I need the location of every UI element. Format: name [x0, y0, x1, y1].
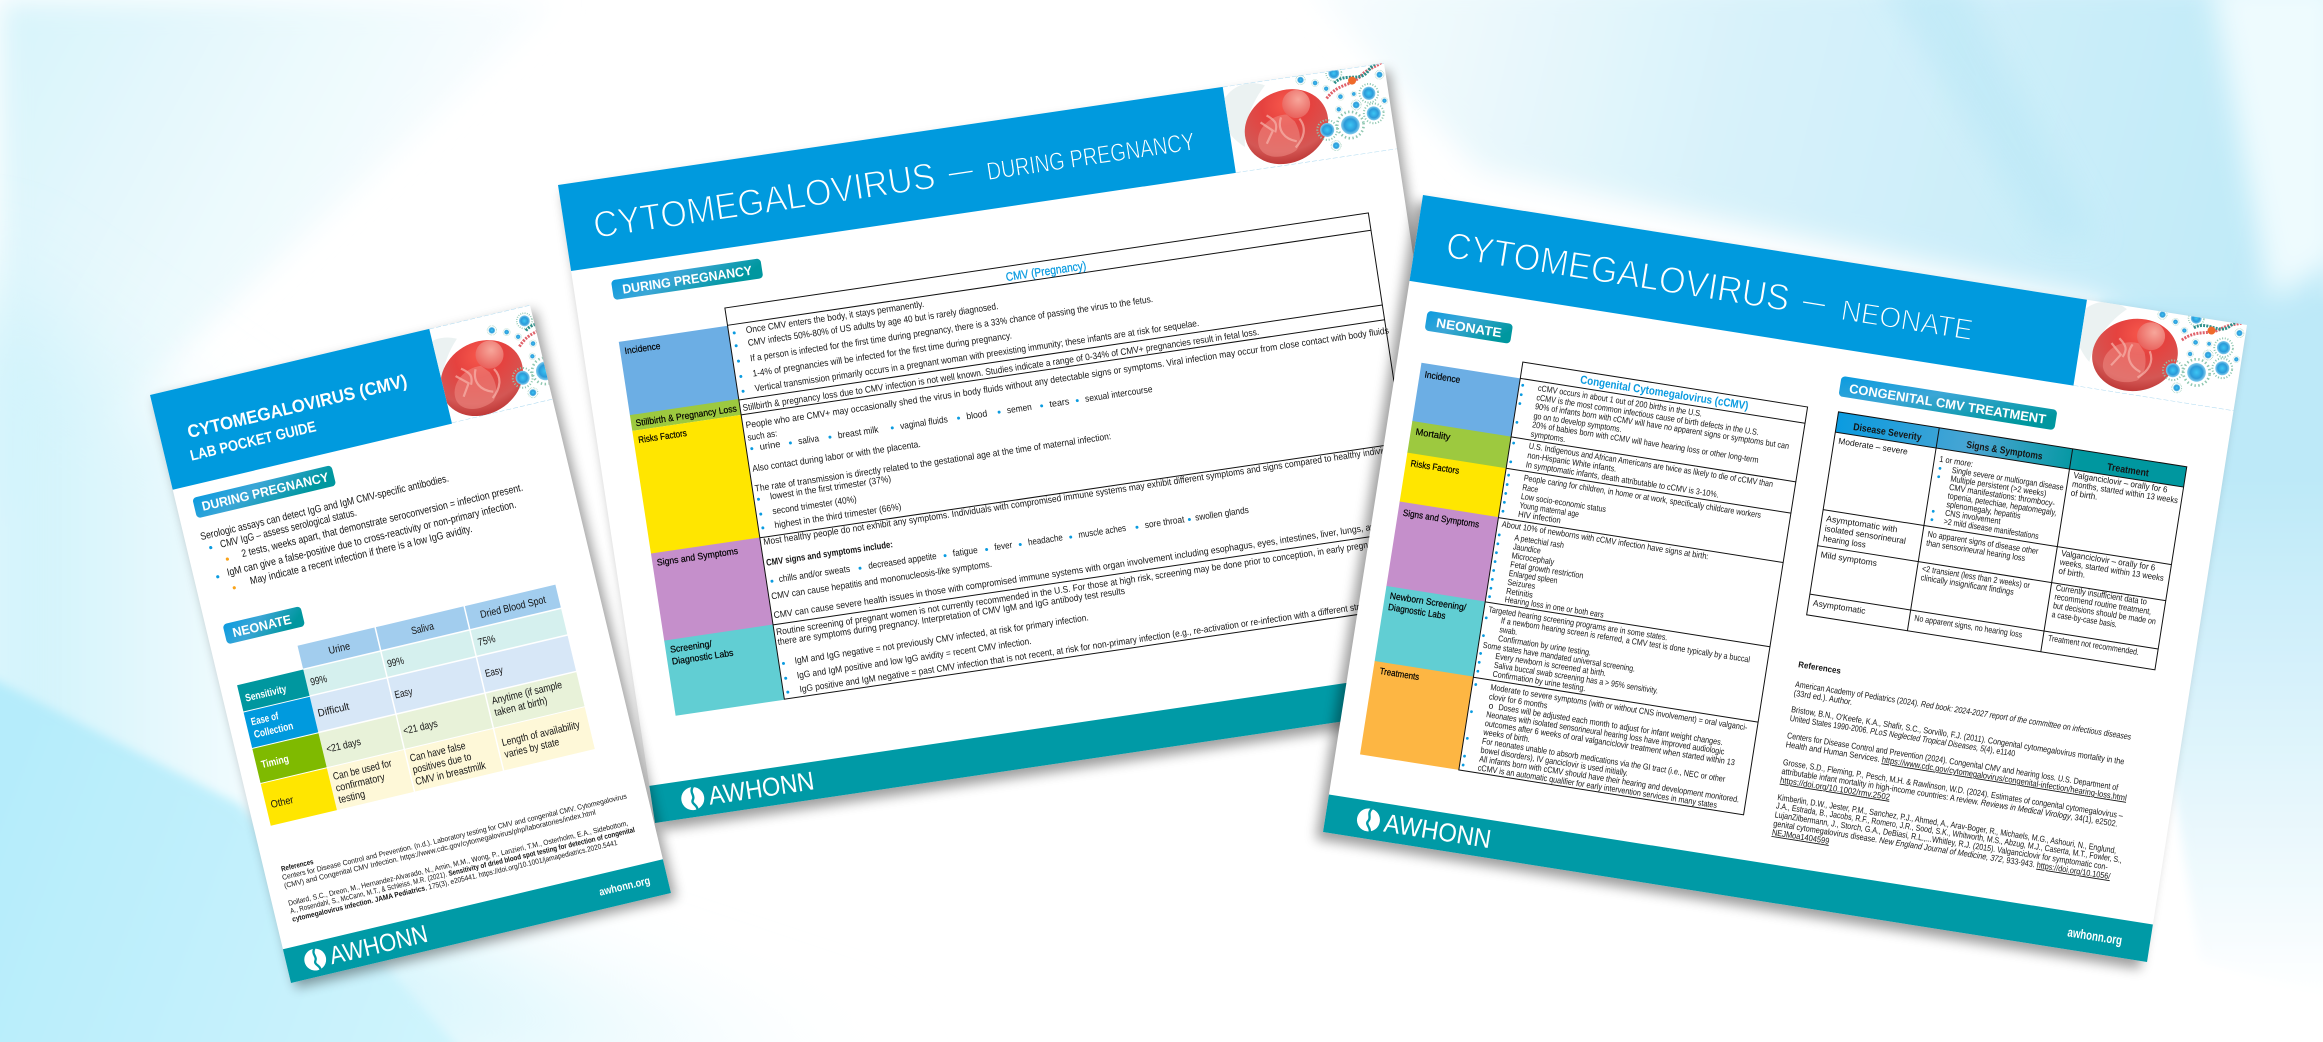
icon: fetus and virus illustration — [2074, 302, 2244, 411]
references: American Academy of Pediatrics (2024). Red book: 2024-2027 report of the committee on infectious diseases — [1795, 679, 2133, 742]
severity column: Asymptomatic — [1812, 598, 1867, 616]
row labels: Risks Factors — [1410, 458, 1460, 476]
section tag: NEONATE — [231, 612, 293, 640]
risk factors text: semen — [1006, 402, 1032, 415]
header banner — [150, 329, 452, 490]
table: specimen comparison: confirmatory — [335, 772, 387, 795]
severity column: Moderate – severe — [1838, 436, 1909, 457]
table: specimen comparison: Collection — [253, 721, 295, 741]
signs column: <2 transient (less than 2 weeks) or — [1922, 563, 2031, 590]
screening text: there are symptoms during pregnancy. Interpretation of CMV IgM and IgG antibody test results — [777, 586, 1126, 647]
references: References — [280, 857, 314, 873]
table: specimen comparison: <21 days — [325, 737, 362, 756]
newborn screening text: Confirmation by urine testing. — [1497, 633, 1592, 658]
signs column: clinically insignificant findings — [1920, 572, 2015, 597]
page: lab pocket guide — [150, 295, 713, 989]
risk factors text: People caring for children, in home or at work, specifically childcare workers — [1523, 473, 1762, 520]
row labels — [619, 326, 784, 716]
signs column: Multiple persistent (>2 weeks) — [1950, 473, 2047, 498]
risk factors text: saliva — [797, 433, 820, 446]
severity column: hearing loss — [1822, 533, 1867, 550]
references: References — [1798, 659, 1842, 676]
references: (33rd ed.). Author. — [1793, 688, 1853, 707]
table: specimen comparison: Difficult — [317, 702, 351, 720]
serology text: May indicate a recent infection if there is a low IgG avidity. — [249, 524, 473, 587]
serology text: IgM can give a false-positive due to cross-reactivity or non-primary infection. — [226, 500, 518, 579]
row labels: Stillbirth & Pregnancy Loss — [635, 403, 738, 428]
signs and symptoms text: CMV can cause severe health issues in those with compromised immune systems with organ involvement including esophagus, eyes, intestines, liver, lungs, and stomach. — [773, 515, 1417, 620]
page: during pregnancy — [557, 57, 1486, 831]
treatment column — [2046, 470, 2180, 659]
newborn screening text — [1476, 604, 1752, 718]
table: specimen comparison: Length of availability — [501, 720, 582, 749]
risk factors text: vaginal fluids — [899, 414, 949, 431]
signs and symptoms text: decreased appetite — [868, 551, 937, 571]
treatments text: For neonates unable to absorb medications via the GI tract (i.e., NEC or other — [1481, 736, 1726, 784]
table: specimen comparison: varies by state — [504, 737, 561, 761]
risk factors text: Low socio-economic status — [1520, 491, 1607, 514]
treatment column: weeks, started within 13 weeks — [2058, 557, 2165, 583]
treatments text: bowel disorders), IV ganciclovir is used initially. — [1480, 745, 1629, 778]
risk factors text: highest in the third trimester (66%) — [774, 502, 902, 530]
row labels: Treatments — [1379, 666, 1420, 682]
references — [1771, 659, 2145, 892]
risk factors text: HIV infection — [1518, 509, 1562, 525]
table: specimen comparison: 75% — [477, 634, 497, 649]
references: Grosse, S.D., Fleming, P., Pesch, M.H. & Rawlinson, W.D. (2024). Estimates of congenital cytomegalovirus – — [1782, 757, 2124, 820]
risk factors text: The rate of transmission is directly related to the gestational age at the time of maternal infection: — [754, 431, 1112, 494]
table: CMV pregnancy: CMV (Pregnancy) — [1005, 258, 1087, 284]
serology text: 2 tests, weeks apart, that demonstrate seroconversion = infection present. — [240, 483, 524, 560]
signs column: No apparent signs, no hearing loss — [1914, 613, 2023, 640]
page: neonate — [1316, 187, 2248, 970]
signs and symptoms text: Seizures — [1507, 577, 1536, 591]
table: congenital CMV — [1459, 362, 1808, 815]
table: specimen comparison: Saliva — [410, 621, 435, 637]
signs and symptoms text: CMV can cause hepatitis and mononucleosis-like symptoms. — [771, 559, 993, 601]
treatments text: o — [1488, 700, 1494, 711]
newborn screening text: Saliva buccal swab screening has a > 95% sensitivity. — [1493, 660, 1659, 695]
risk factors text: such as: — [747, 428, 778, 443]
signs and symptoms text: Microcephaly — [1511, 550, 1556, 567]
severity column: Mild symptoms — [1820, 549, 1878, 568]
header banner: DURING PREGNANCY — [985, 128, 1197, 186]
table: treatment: Signs & Symptoms — [1966, 440, 2044, 463]
signs and symptoms text: Jaundice — [1512, 541, 1542, 556]
incidence text: cCMV occurs in about 1 out of 200 births in the U.S. — [1537, 383, 1703, 419]
signs column: 1 or more: — [1939, 454, 1974, 469]
signs and symptoms text: A petechial rash — [1514, 532, 1565, 550]
section tag: DURING PREGNANCY — [200, 469, 330, 514]
table: specimen comparison: Can be used for — [332, 758, 393, 783]
incidence text: cCMV is the most common infectious cause of birth defects in the U.S. — [1536, 392, 1760, 437]
risk factors text — [1501, 470, 1762, 556]
incidence text: symptoms. — [1530, 429, 1566, 444]
signs and symptoms text — [1487, 518, 1709, 634]
incidence text: If a person is infected for the first time during pregnancy, there is a 33% chance of passing the virus to the fetus. — [749, 294, 1154, 363]
screening text: IgG positive and IgM negative = past CMV infection that is not recent, at risk for non-primary infection (e.g., re-activation or re-infection with a different strain). — [799, 599, 1376, 694]
treatment column: months, started within 13 weeks — [2071, 479, 2179, 505]
references: LujanZilbermann, J., Storch, G.A., DeBiasi, R.L.,...Whitley, R.J. (2015). Valganciclovir for symptomatic con- — [1774, 809, 2109, 872]
signs and symptoms text: headache — [1027, 532, 1063, 547]
table: treatment: Treatment — [2106, 462, 2150, 479]
section tag — [223, 606, 305, 644]
logo: AWHONN — [327, 920, 430, 970]
treatment column: a case-by-case basis. — [2051, 609, 2118, 629]
table: specimen comparison — [231, 585, 595, 826]
treatments text: clovir for 6 months — [1488, 691, 1548, 710]
mortality text — [1509, 438, 1774, 508]
references: Health and Human Services. https://www.cdc.gov/cytomegalovirus/congenital-infection/hearing-loss.html — [1785, 739, 2128, 803]
signs column — [1914, 454, 2066, 642]
risk factors text: Also contact during labor or with the placenta. — [752, 439, 921, 474]
references: https://doi.org/10.1002/rmv.2502 — [1779, 775, 1891, 802]
signs column: CNS involvement — [1944, 508, 2002, 526]
row labels: Incidence — [624, 341, 661, 356]
references: Bristow, B.N., O'Keefe, K.A., Shafir, S.C., Sorvillo, F.J. (2011). Congenital cytomegalovirus mortality in the — [1791, 704, 2125, 767]
incidence text: 1-4% of pregnancies will be infected for the first time during pregnancy. — [752, 330, 1012, 379]
screening text — [775, 532, 1429, 696]
stillbirth text: Stillbirth & pregnancy loss due to CMV infection is not well known. Studies indicate a range of 0-34% of CMV+ pregnancies result in fetal loss. — [742, 327, 1260, 413]
table: specimen comparison: Dried Blood Spot — [479, 595, 547, 621]
signs column: Single severe or multiorgan disease — [1951, 465, 2065, 492]
treatments text: Moderate to severe symptoms (with or without CNS involvement) = oral valganci- — [1490, 682, 1748, 732]
section tag: CONGENITAL CMV TREATMENT — [1848, 381, 2047, 427]
serology text: Serologic assays can detect IgG and IgM CMV-specific antibodies. — [199, 474, 450, 543]
signs and symptoms text: Retinitis — [1505, 586, 1534, 600]
row labels: Risks Factors — [638, 428, 688, 445]
signs column: CMV manifestations: thrombocy- — [1948, 482, 2056, 508]
footer band: awhonn.org — [2067, 924, 2123, 948]
treatments text: Neonates with isolated sensorineural hearing loss have improved audiologic — [1486, 709, 1726, 757]
treatments text: weeks of birth. — [1482, 727, 1531, 744]
table: treatment: Disease Severity — [1852, 422, 1923, 444]
treatment column: of birth. — [2058, 566, 2086, 580]
table: specimen comparison: 99% — [386, 656, 405, 670]
signs column: >2 mild disease manifestations — [1943, 516, 2039, 541]
row labels: Newborn Screening/ — [1389, 591, 1467, 613]
risk factors text — [744, 325, 1405, 532]
table: specimen comparison: Easy — [394, 686, 414, 701]
title: CYTOMEGALOVIRUS (CMV) — [185, 371, 409, 442]
risk factors text: breast milk — [837, 424, 879, 440]
risk factors text: People who are CMV+ may occasionally shed the virus in body fluids without any detectable signs or symptoms. Viral infection may occur from close contact with body fluids — [745, 325, 1390, 430]
footer band: awhonn.org — [598, 875, 651, 899]
treatment column: recommend routine treatment, — [2054, 591, 2152, 616]
signs and symptoms text: Enlarged spleen — [1508, 568, 1558, 586]
mortality text: non-Hispanic White infants. — [1527, 450, 1617, 474]
references: genital cytomegalovirus disease. New England Journal of Medicine, 372, 933-943. https://doi.org/10.1056/ — [1773, 818, 2112, 881]
screening text: IgM and IgG negative = not previously CMV infected, at risk for primary infection. — [794, 612, 1089, 666]
table: specimen comparison: CMV in breastmilk — [414, 761, 488, 788]
newborn screening text: Some states have mandated universal screening. — [1482, 640, 1636, 674]
references: NEJMoa1404599 — [1771, 827, 1830, 846]
row labels: Screening/ — [669, 639, 713, 655]
row labels: Incidence — [1424, 369, 1461, 385]
severity column — [1812, 436, 1920, 620]
footer band — [1323, 794, 2153, 962]
serology text — [199, 457, 531, 596]
signs and symptoms text: fatigue — [952, 545, 978, 558]
table: specimen comparison: Anytime (if sample — [491, 680, 563, 707]
references: Centers for Disease Control and Prevention (2024). Congenital CMV and hearing loss. U.S. Department of — [1786, 730, 2120, 792]
severity column: Asymptomatic with — [1826, 513, 1898, 534]
table: specimen comparison: Sensitivity — [244, 684, 288, 705]
risk factors text: tears — [1049, 396, 1070, 409]
header banner: LAB POCKET GUIDE — [188, 418, 318, 465]
signs and symptoms text: About 10% of newborns with cCMV infection have signs at birth: — [1501, 519, 1709, 561]
references: J.A., Estrada, B., Jacobs, R.F., Romero, J.R., Sood, S.K., Whitworth, M.S., Abzug, M.J., Caserta, M.T., Fowler, S., — [1775, 800, 2123, 865]
references: attributable infant mortality in high-income countries: A review. Reviews in Medical Virology, 34(1), e2502. — [1781, 766, 2118, 829]
table: treatment — [1807, 412, 2187, 670]
treatment column: but decisions should be made on — [2052, 600, 2157, 626]
references: cytomegalovirus infection. JAMA Pediatrics, 175(3), e205441. https://doi.org/10.1001/jamapediatrics.2020.5441 — [291, 838, 618, 924]
title: CYTOMEGALOVIRUS — [1443, 225, 1793, 319]
logo: AWHONN — [706, 765, 816, 811]
signs and symptoms text — [762, 442, 1417, 620]
risk factors text: second trimester (40%) — [772, 494, 857, 516]
references — [279, 783, 638, 924]
treatment column: Currently insufficient data to — [2055, 582, 2148, 607]
table: specimen comparison: taken at birth) — [494, 696, 549, 719]
newborn screening text: Every newborn is screened at birth. — [1495, 651, 1607, 678]
incidence text: Vertical transmission primarily occurs in a pregnant woman with preexisting immunity; these infants are at risk for sequelae. — [754, 318, 1200, 393]
title: CYTOMEGALOVIRUS — [590, 155, 938, 246]
signs column: topenia, petechiae, hepatomegaly, — [1947, 490, 2057, 518]
table: specimen comparison: 99% — [309, 674, 328, 689]
treatments text: All infants born with cCMV should have their hearing and development monitored. — [1479, 754, 1740, 804]
risk factors text: lowest in the first trimester (37%) — [769, 474, 892, 501]
table: specimen comparison: testing — [338, 789, 367, 806]
row labels: Signs and Symptoms — [656, 546, 739, 568]
row labels: Diagnostic Labs — [671, 648, 734, 667]
risk factors text: sexual intercourse — [1084, 384, 1153, 404]
treatments text: cCMV is an automatic qualifier for early intervention services in many states — [1477, 762, 1718, 810]
risk factors text: urine — [759, 439, 781, 452]
header banner: NEONATE — [1839, 295, 1975, 347]
screening text: IgG and IgM positive and low IgG avidity = recent CMV infection. — [796, 636, 1032, 681]
serology text: CMV IgG – assess serological status. — [219, 508, 358, 551]
logo — [301, 920, 430, 976]
treatments text — [1461, 679, 1751, 813]
signs column: than sensorineural hearing loss — [1926, 538, 2026, 563]
references: United States 1990-2006. PLoS Neglected Tropical Diseases, 5(4), e1140 — [1789, 713, 2016, 758]
icon: fetus and virus illustration — [430, 305, 552, 423]
incidence text: go on to develop symptoms. — [1533, 410, 1622, 434]
table: congenital CMV: Congenital Cytomegalovirus (cCMV) — [1579, 374, 1749, 413]
references: Dollard, S.C., Dreon, M., Hernandez-Alvarado, N., Amin, M.M., Wong, P., Lanzieri, T.M., Osterholm, E.A., Sidebottom, — [287, 818, 629, 908]
table: specimen comparison: Other — [270, 795, 295, 811]
row labels: Mortality — [1415, 427, 1451, 442]
logo: AWHONN — [1382, 808, 1493, 854]
table: specimen comparison: Timing — [260, 754, 290, 771]
signs and symptoms text: Hearing loss in one or both ears — [1504, 594, 1604, 620]
signs and symptoms text: muscle aches — [1078, 523, 1127, 540]
signs and symptoms text: swollen glands — [1194, 505, 1250, 523]
mortality text: In symptomatic infants, death attributable to cCMV is 3-10%. — [1525, 459, 1719, 500]
signs column: No apparent signs of disease other — [1927, 529, 2039, 556]
table: specimen comparison: <21 days — [402, 719, 439, 737]
row labels: Diagnostic Labs — [1387, 602, 1447, 621]
table: specimen comparison: positives due to — [412, 752, 473, 776]
risk factors text: Race — [1522, 482, 1539, 494]
signs and symptoms text: sore throat — [1144, 514, 1185, 530]
risk factors text: Young maternal age — [1519, 500, 1580, 519]
section tag: DURING PREGNANCY — [621, 263, 753, 297]
treatment column: Treatment not recommended. — [2047, 633, 2140, 657]
references: Centers for Disease Control and Prevention. (n.d.). Laboratory testing for CMV and congenital CMV. Cytomegalovirus — [281, 791, 628, 882]
newborn screening text: swab. — [1499, 624, 1518, 637]
treatment column: Valganciclovir – orally for 6 — [2073, 470, 2168, 495]
risk factors text: blood — [966, 408, 988, 421]
header banner — [1410, 195, 2087, 386]
table: specimen comparison: Ease of — [250, 711, 280, 728]
newborn screening text: If a newborn hearing screen is referred, a CMV test is done typically by a buccal — [1500, 615, 1751, 664]
footer band — [649, 664, 1481, 823]
newborn screening text: Confirmation by urine testing. — [1492, 669, 1586, 693]
screening text: Routine screening of pregnant women is not currently recommended in the U.S. For those at high risk, screening may be done prior to conception, in early pregnancy, or when — [775, 532, 1420, 637]
incidence text: CMV infects 50%-80% of US adults by age 40 but is rarely diagnosed. — [747, 301, 999, 348]
header banner — [558, 87, 1236, 271]
signs and symptoms text: CMV signs and symptoms include: — [765, 539, 894, 568]
severity column: isolated sensorineural — [1824, 523, 1907, 546]
treatment column: Valganciclovir – orally for 6 — [2061, 548, 2156, 573]
treatments text: Doses will be adjusted each month to adjust for infant weight changes. — [1498, 702, 1724, 747]
signs and symptoms text: Fetal growth restriction — [1510, 559, 1584, 581]
table: CMV pregnancy — [725, 213, 1431, 699]
treatments text: outcomes after 6 weeks of oral valganciclovir treatment when started within 13 — [1484, 718, 1736, 767]
references: A., Rosendahl, S., McCann, M.T., & Schleiss, M.R. (2021). Sensitivity of dried blood spot testing for detection of congenital — [289, 825, 636, 915]
table: specimen comparison: Can have false — [409, 741, 467, 765]
incidence text: 20% of babies born with cCMV will have hearing loss or other long-term — [1532, 419, 1759, 465]
newborn screening text: Targeted hearing screening programs are in some states. — [1488, 604, 1668, 642]
signs and symptoms text: chills and/or sweats — [778, 564, 851, 584]
logo — [1355, 803, 1493, 854]
incidence text: Once CMV enters the body, it stays permanently. — [745, 299, 925, 335]
incidence text — [1513, 380, 1793, 479]
signs and symptoms text: fever — [994, 540, 1013, 552]
row labels — [1360, 363, 1520, 770]
section tag: NEONATE — [1435, 315, 1503, 340]
signs column: splenomegaly, hepatitis — [1946, 499, 2021, 521]
incidence text — [732, 260, 1200, 395]
references: Kimberlin, D.W., Jester, P.M., Sanchez, P.J., Ahmed, A., Arav-Boger, R., Michaels, M.G., Ashouri, N., Englund, — [1777, 792, 2117, 855]
mortality text: U.S. Indigenous and African Americans are twice as likely to die of cCMV than — [1528, 441, 1774, 489]
table: specimen comparison: Urine — [328, 641, 352, 657]
treatment column: of birth. — [2070, 488, 2098, 502]
footer band — [283, 859, 671, 983]
references: (CMV) and Congenital CMV Infection. https://www.cdc.gov/cytomegalovirus/php/laboratories/index.html — [283, 808, 597, 890]
incidence text: 90% of infants born with cCMV will have no apparent signs or symptoms but can — [1534, 401, 1790, 451]
section tag — [1425, 311, 1513, 344]
icon: fetus and virus illustration — [1223, 63, 1397, 173]
signs and symptoms text: Most healthy people do not exhibit any symptoms. Individuals with compromised immune systems may exhibit different symptoms and signs compared to healthy individuals. — [763, 442, 1405, 547]
table: specimen comparison: Easy — [484, 665, 505, 680]
logo — [679, 765, 816, 815]
row labels: Signs and Symptoms — [1402, 508, 1480, 530]
